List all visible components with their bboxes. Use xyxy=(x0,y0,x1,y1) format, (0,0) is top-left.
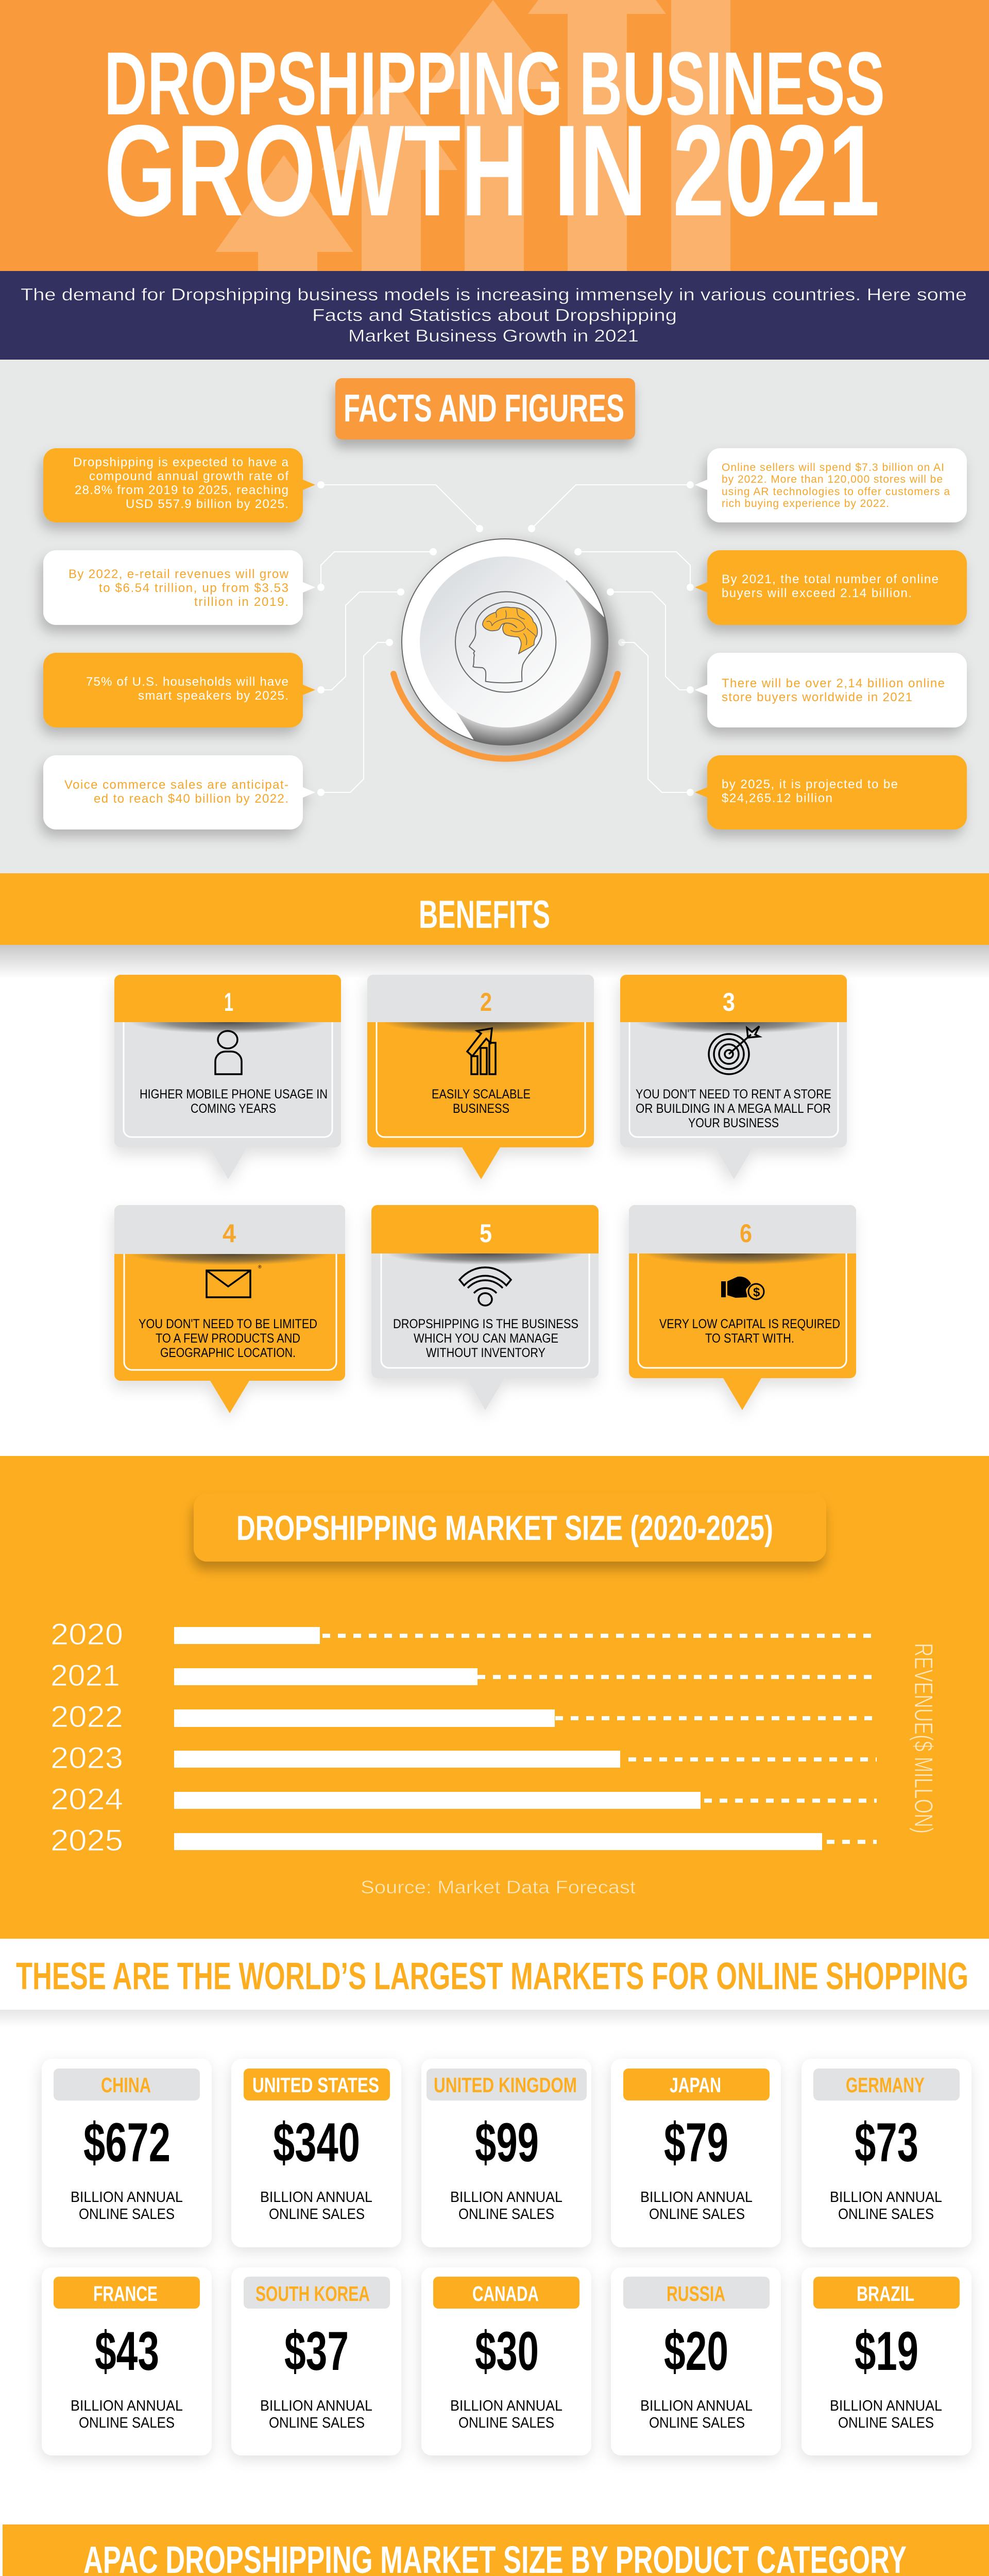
market card: South Korea: $37 xyxy=(284,2320,349,2382)
market card: Russia: RUSSIA xyxy=(667,2282,725,2306)
benefit card 4: TO A FEW PRODUCTS AND xyxy=(156,1331,300,1346)
fact: compound annual growth: Dropshipping is expected to have a xyxy=(73,455,289,469)
benefit card 2: BUSINESS xyxy=(453,1101,509,1116)
market card: China: ONLINE SALES xyxy=(79,2206,175,2223)
market card: Canada: ONLINE SALES xyxy=(458,2415,554,2431)
market card: United States: UNITED STATES xyxy=(252,2073,379,2097)
market card: France: FRANCE xyxy=(93,2282,158,2306)
bar 2023: 2023 xyxy=(50,1741,123,1775)
icon: hand with coin: $ xyxy=(753,1285,760,1299)
icon: envelope xyxy=(207,1270,250,1297)
heading band: APAC market size xyxy=(3,2524,989,2576)
benefit card 5: DROPSHIPPING IS THE BUSINESS xyxy=(393,1317,578,1331)
title xyxy=(104,33,885,243)
bar 2020: 2020 xyxy=(50,1618,123,1651)
benefit card 4: YOU DON'T NEED TO BE LIMITED xyxy=(139,1317,317,1331)
benefit card 3: 3 xyxy=(723,988,735,1016)
bar 2025: 2025 xyxy=(50,1824,123,1857)
icon: person xyxy=(215,1031,242,1074)
benefit card 3: YOU DON'T NEED TO RENT A STORE xyxy=(636,1087,831,1101)
benefit card 4: 4 xyxy=(223,1219,236,1248)
benefit card 2 xyxy=(367,975,594,1179)
fact: online sellers AI spend xyxy=(695,448,967,522)
fact: smart speakers xyxy=(43,653,315,727)
benefit card 5 xyxy=(371,1205,599,1410)
heading: market size: DROPSHIPPING MARKET SIZE (2020-2025) xyxy=(236,1509,773,1548)
intro text band: Facts and Statistics about Dropshipping xyxy=(312,306,677,325)
panel: facts and figures xyxy=(0,360,989,873)
benefit card 3 xyxy=(620,975,847,1179)
benefit card 4: GEOGRAPHIC LOCATION. xyxy=(160,1346,296,1360)
fact: 2025 projection xyxy=(695,755,967,829)
benefit card 4: ® xyxy=(258,1264,262,1269)
heading band: benefits: BENEFITS xyxy=(419,893,550,937)
benefit card 1 xyxy=(114,975,341,1179)
connector lines xyxy=(317,481,694,796)
market card: Brazil xyxy=(802,2267,971,2455)
central brain disc xyxy=(394,539,618,759)
market card: Canada xyxy=(421,2267,591,2455)
market card: China: CHINA xyxy=(101,2073,151,2097)
market card: Russia: BILLION ANNUAL xyxy=(640,2398,753,2414)
bar 2021: 2021 xyxy=(50,1659,120,1692)
market card: United Kingdom: BILLION ANNUAL xyxy=(450,2189,562,2206)
heading: market size xyxy=(194,1494,826,1562)
intro text band xyxy=(0,271,989,360)
intro text band: The demand for Dropshipping business models is increasing immensely in various countries. Here some xyxy=(21,285,967,304)
axis label: revenue: REVENUE($ MILLON) xyxy=(909,1643,938,1834)
market card: France: ONLINE SALES xyxy=(79,2415,175,2431)
hero banner xyxy=(0,0,989,271)
market card: Canada: BILLION ANNUAL xyxy=(450,2398,562,2414)
market card: Russia: $20 xyxy=(664,2320,728,2382)
fact: online sellers AI spend: by 2022. More than 120,000 stores will be xyxy=(722,473,943,485)
market card: Germany: GERMANY xyxy=(846,2073,925,2097)
icon: head with brain xyxy=(455,591,556,692)
market card: Brazil: BILLION ANNUAL xyxy=(830,2398,942,2414)
market card: Brazil: ONLINE SALES xyxy=(838,2415,934,2431)
benefit card 1: HIGHER MOBILE PHONE USAGE IN xyxy=(140,1087,328,1101)
benefit card 2: EASILY SCALABLE xyxy=(432,1087,531,1101)
market card: France: $43 xyxy=(95,2320,159,2382)
benefit card 2: 2 xyxy=(480,988,492,1016)
heading: largest markets xyxy=(0,1955,989,2027)
heading band: benefits xyxy=(0,873,989,978)
heading: facts and figures: FACTS AND FIGURES xyxy=(344,386,624,430)
fact: e-retail revenues: By 2022, e-retail revenues will grow xyxy=(69,567,289,581)
fact: e-retail revenues: to $6.54 trillion, up from $3.53 xyxy=(99,581,288,595)
fact: voice commerce: ed to reach $40 billion by 2022. xyxy=(94,792,288,806)
benefit card 5: WHICH YOU CAN MANAGE xyxy=(414,1331,558,1346)
fact: e-retail revenues: trillion in 2019. xyxy=(194,595,288,609)
market card: United States xyxy=(231,2059,401,2247)
market card: South Korea: ONLINE SALES xyxy=(269,2415,365,2431)
bar 2022 xyxy=(50,1700,877,1734)
market card: United Kingdom: UNITED KINGDOM xyxy=(434,2073,577,2097)
market card: Germany: $73 xyxy=(855,2111,918,2173)
benefit card 3: YOUR BUSINESS xyxy=(688,1116,779,1130)
benefit card 6 xyxy=(629,1205,856,1410)
fact: online store buyers: There will be over 2,14 billion online xyxy=(722,676,945,690)
fact: e-retail revenues xyxy=(43,550,315,625)
fact: online buyers 2021: By 2021, the total number of online xyxy=(722,572,939,586)
market card: South Korea: BILLION ANNUAL xyxy=(260,2398,372,2414)
benefit card 4 xyxy=(114,1205,345,1413)
market card: Japan: JAPAN xyxy=(670,2073,721,2097)
icon: growth bars and arrow xyxy=(467,1028,496,1074)
fact: smart speakers: 75% of U.S. households will have xyxy=(86,675,288,689)
market card: Russia xyxy=(611,2267,781,2455)
fact: compound annual growth: USD 557.9 billion by 2025. xyxy=(126,497,288,511)
fact: online sellers AI spend: rich buying experience by 2022. xyxy=(722,498,889,510)
bar 2021 xyxy=(50,1659,877,1692)
fact: compound annual growth: compound annual growth rate of xyxy=(89,469,288,483)
benefit card 5: 5 xyxy=(480,1219,492,1248)
benefit card 5: WITHOUT INVENTORY xyxy=(426,1346,545,1360)
panel: market size chart xyxy=(0,1456,989,1939)
icon: target and dart xyxy=(709,1026,759,1074)
bar 2023 xyxy=(50,1741,877,1775)
market card: Germany: ONLINE SALES xyxy=(838,2206,934,2223)
market card: Japan: ONLINE SALES xyxy=(649,2206,745,2223)
market card: France: BILLION ANNUAL xyxy=(71,2398,183,2414)
bar 2025 xyxy=(50,1824,877,1857)
market card: Germany xyxy=(802,2059,971,2247)
fact: online store buyers: store buyers worldwide in 2021 xyxy=(722,690,912,704)
market card: South Korea xyxy=(231,2267,401,2455)
bar 2024 xyxy=(50,1783,877,1816)
fact: online buyers 2021: buyers will exceed 2.14 billion. xyxy=(722,586,912,600)
market card: Japan xyxy=(611,2059,781,2247)
benefit card 6: 6 xyxy=(740,1219,752,1248)
bar 2024: 2024 xyxy=(50,1783,123,1816)
fact: online buyers 2021 xyxy=(695,550,967,625)
market card: Canada: CANADA xyxy=(472,2282,539,2306)
benefit card 1: 1 xyxy=(224,988,233,1016)
fact: 2025 projection: $24,265.12 billion xyxy=(722,791,832,805)
bar 2020 xyxy=(50,1618,877,1651)
icon: hand with coin xyxy=(721,1277,764,1299)
market card: China xyxy=(42,2059,212,2247)
market card: United States: ONLINE SALES xyxy=(269,2206,365,2223)
benefit card 6: TO START WITH. xyxy=(705,1331,794,1346)
market card: Canada: $30 xyxy=(475,2320,539,2382)
market card: China: BILLION ANNUAL xyxy=(71,2189,183,2206)
market card: Brazil: $19 xyxy=(855,2320,918,2382)
market card: Japan: BILLION ANNUAL xyxy=(640,2189,753,2206)
fact: online sellers AI spend: Online sellers will spend $7.3 billion on AI xyxy=(722,462,944,473)
market card: Germany: BILLION ANNUAL xyxy=(830,2189,942,2206)
market card: Brazil: BRAZIL xyxy=(857,2282,914,2306)
market card: United States: BILLION ANNUAL xyxy=(260,2189,372,2206)
icon: wifi signal xyxy=(459,1267,511,1306)
fact: voice commerce: Voice commerce sales are anticipat- xyxy=(64,778,288,792)
market card: United Kingdom: ONLINE SALES xyxy=(458,2206,554,2223)
bar 2022: 2022 xyxy=(50,1700,123,1734)
market card: United Kingdom xyxy=(421,2059,591,2247)
fact: compound annual growth xyxy=(43,448,315,522)
heading: facts and figures xyxy=(335,378,635,439)
market card: France xyxy=(42,2267,212,2455)
source note: Source: Market Data Forecast xyxy=(361,1877,636,1897)
market card: United Kingdom: $99 xyxy=(475,2111,539,2173)
market card: United States: $340 xyxy=(273,2111,360,2173)
benefit card 6: VERY LOW CAPITAL IS REQUIRED xyxy=(659,1317,840,1331)
fact: compound annual growth: 28.8% from 2019 to 2025, reaching xyxy=(75,483,288,497)
fact: online store buyers xyxy=(695,653,967,727)
background arrows xyxy=(215,0,730,271)
fact: voice commerce xyxy=(43,755,315,829)
fact: smart speakers: smart speakers by 2025. xyxy=(138,689,288,703)
benefit card 3: OR BUILDING IN A MEGA MALL FOR xyxy=(636,1101,831,1116)
market card: Japan: $79 xyxy=(664,2111,728,2173)
market card: Russia: ONLINE SALES xyxy=(649,2415,745,2431)
intro text band: Market Business Growth in 2021 xyxy=(348,326,639,345)
market card: South Korea: SOUTH KOREA xyxy=(255,2282,370,2306)
market card: China: $672 xyxy=(83,2111,170,2173)
fact: 2025 projection: by 2025, it is projected to be xyxy=(722,777,898,791)
benefit card 1: COMING YEARS xyxy=(191,1101,276,1116)
fact: online sellers AI spend: using AR technologies to offer customers a xyxy=(722,486,950,498)
